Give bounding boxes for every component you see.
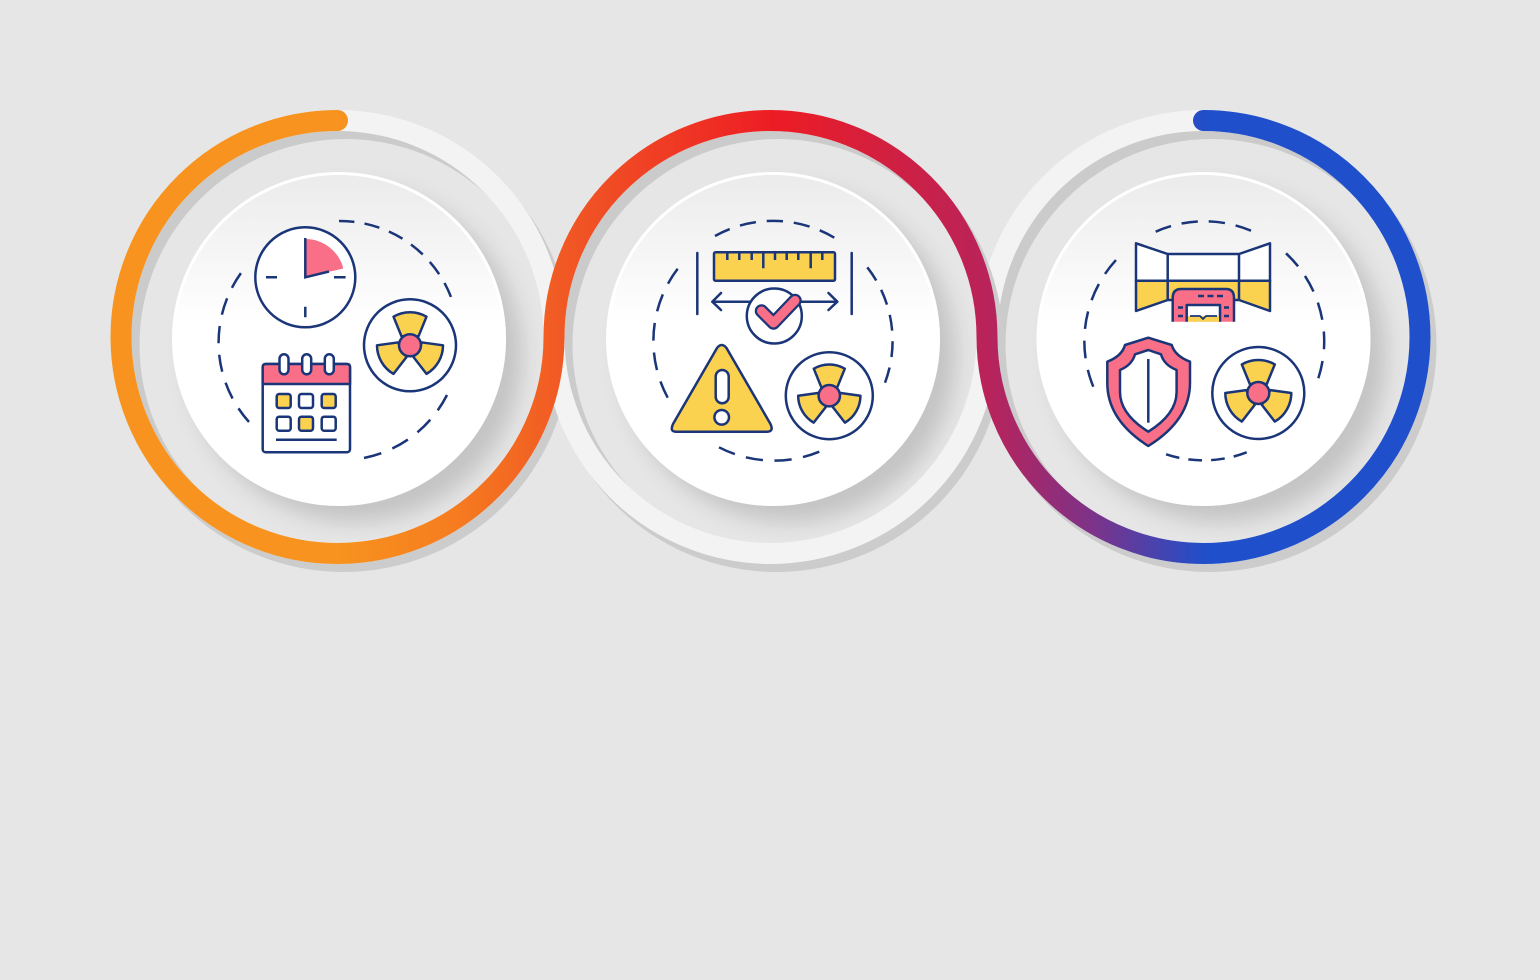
icon: dashed ring [653, 221, 893, 461]
icon: check badge [747, 288, 802, 344]
icon: theatre room with device [1136, 243, 1270, 322]
icon: dashed ring [219, 221, 451, 458]
icon: warning triangle [672, 345, 772, 432]
icon: shield [1107, 338, 1190, 446]
icon: dashed ring [1084, 221, 1324, 460]
icon: width limits with double arrow [697, 253, 852, 314]
panel: step 1, clock and calendar [116, 118, 570, 572]
panel: step 2, ruler and warning [550, 118, 1004, 572]
panel: step 3, shield and radiation [982, 118, 1436, 572]
gradient connector path linking the three rings [121, 120, 1420, 554]
icon: radiation symbol [786, 352, 873, 439]
icon: clock [255, 227, 355, 327]
icon: radiation symbol [364, 299, 456, 391]
icon: ruler [714, 252, 835, 281]
icon: radiation symbol [1212, 347, 1304, 439]
icon: calendar [263, 354, 350, 452]
